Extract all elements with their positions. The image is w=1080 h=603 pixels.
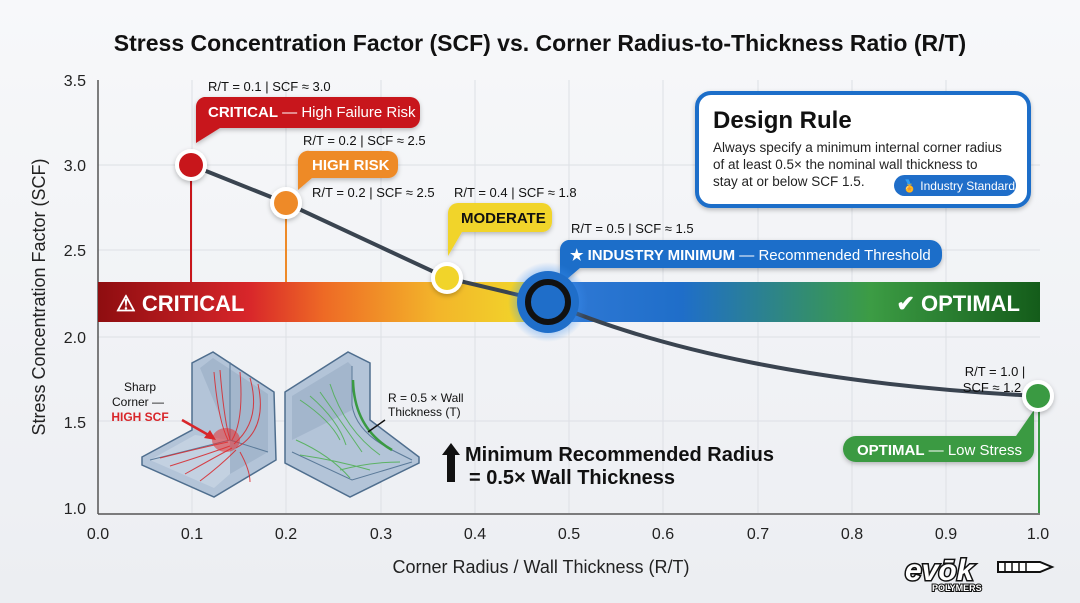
title: Stress Concentration Factor (SCF) vs. Corner Radius-to-Thickness Ratio (R/T) <box>114 30 966 56</box>
y axis labels <box>64 73 86 518</box>
axes <box>98 80 1040 514</box>
gradient band: ⚠ CRITICAL <box>116 291 244 316</box>
design rule box: Design Rule <box>713 107 852 134</box>
point: moderate: MODERATE <box>461 210 546 227</box>
point: optimal: OPTIMAL — Low Stress <box>857 442 1022 459</box>
curve <box>191 165 1038 396</box>
illustration: radiused corner bracket <box>285 352 464 497</box>
gradient band: ✔ OPTIMAL <box>896 291 1020 316</box>
design rule box: 🏅 Industry Standard <box>902 179 1015 193</box>
point: critical <box>175 79 420 181</box>
point: critical: R/T = 0.1 | SCF ≈ 3.0 <box>208 79 331 94</box>
point: industry minimum <box>508 221 942 342</box>
illustration: radiused corner bracket: Thickness (T) <box>388 405 461 419</box>
x axis labels: 0.5 <box>558 526 580 543</box>
y axis labels: 3.5 <box>64 73 86 90</box>
illustration: radiused corner bracket: R = 0.5 × Wall <box>388 391 464 405</box>
x axis labels: 0.8 <box>841 526 863 543</box>
point: high risk: HIGH RISK <box>312 157 390 174</box>
design rule box: of at least 0.5× the nominal wall thickness to <box>713 157 978 172</box>
x axis labels: 0.2 <box>275 526 297 543</box>
y axis labels: 3.0 <box>64 158 86 175</box>
illustration: sharp corner bracket <box>111 352 276 497</box>
point: optimal: SCF ≈ 1.2 <box>963 380 1021 395</box>
logo <box>905 554 1052 593</box>
grid <box>98 80 1040 513</box>
y axis labels: 1.0 <box>64 501 86 518</box>
x axis labels: 1.0 <box>1027 526 1049 543</box>
x axis labels: 0.9 <box>935 526 957 543</box>
logo: POLYMERS <box>932 583 982 593</box>
x axis labels: 0.0 <box>87 526 109 543</box>
y axis labels: 1.5 <box>64 415 86 432</box>
point: optimal: R/T = 1.0 | <box>965 364 1025 379</box>
point: optimal <box>843 364 1054 462</box>
point: industry minimum: R/T = 0.5 | SCF ≈ 1.5 <box>571 221 694 236</box>
illustration: sharp corner bracket: HIGH SCF <box>111 410 169 424</box>
x axis labels: 0.7 <box>747 526 769 543</box>
logo: evōk <box>905 554 975 587</box>
y axis labels: 2.5 <box>64 243 86 260</box>
drop lines <box>190 165 192 282</box>
point: industry minimum: ★ INDUSTRY MINIMUM — Recommended Threshold <box>570 247 931 264</box>
x axis labels: 0.4 <box>464 526 486 543</box>
design rule box: stay at or below SCF 1.5. <box>713 174 865 189</box>
x axis labels: 0.6 <box>652 526 674 543</box>
point: moderate: R/T = 0.4 | SCF ≈ 1.8 <box>454 185 577 200</box>
x axis title: Corner Radius / Wall Thickness (R/T) <box>392 557 690 577</box>
point: high risk: R/T = 0.2 | SCF ≈ 2.5 <box>303 133 426 148</box>
y axis labels: 2.0 <box>64 330 86 347</box>
gradient band <box>98 282 1040 322</box>
min radius callout: Minimum Recommended Radius <box>465 444 774 466</box>
illustration: sharp corner bracket: Corner — <box>112 395 164 409</box>
x axis labels: 0.3 <box>370 526 392 543</box>
x axis labels <box>87 526 1049 543</box>
point: high risk: R/T = 0.2 | SCF ≈ 2.5 <box>312 185 435 200</box>
x axis labels: 0.1 <box>181 526 203 543</box>
point: moderate <box>431 185 577 294</box>
illustration: sharp corner bracket: Sharp <box>124 380 156 394</box>
design rule box: Always specify a minimum internal corner radius <box>713 140 1002 155</box>
design rule box <box>697 93 1029 206</box>
point: high risk <box>270 133 435 219</box>
min radius callout <box>442 443 774 489</box>
y axis title: Stress Concentration Factor (SCF) <box>29 158 49 436</box>
point: critical: CRITICAL — High Failure Risk <box>208 104 416 121</box>
min radius callout: = 0.5× Wall Thickness <box>469 467 675 489</box>
